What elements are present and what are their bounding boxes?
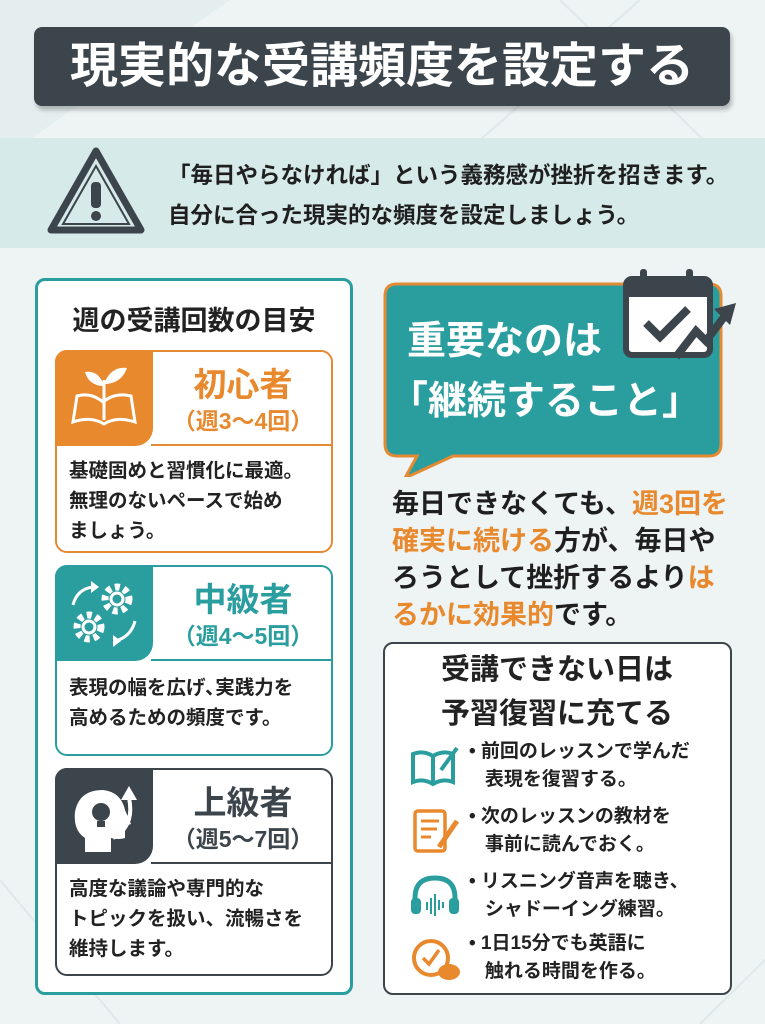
body xyxy=(69,677,293,729)
body xyxy=(69,460,303,542)
icon: calendar with arrow xyxy=(623,269,736,360)
bubble text: 「継続すること」 xyxy=(389,380,701,423)
title: 初心者 xyxy=(194,366,292,403)
panel: weekly frequency xyxy=(35,278,353,995)
card: advanced: （週5〜7回） xyxy=(173,826,313,852)
card: beginner: （週3〜4回） xyxy=(173,408,313,434)
panel: review on off days xyxy=(383,642,732,995)
warning text: 自分に合った現実的な頻度を設定しましょう。 xyxy=(168,203,639,228)
paragraph: continuation: ろうとして挫折するよりは xyxy=(392,563,715,593)
item 1: 表現を復習する。 xyxy=(485,769,637,790)
item 4: • 1日15分でも英語に xyxy=(469,933,646,954)
warning band xyxy=(0,138,765,248)
body: トピックを扱い、流暢さを xyxy=(69,908,303,930)
warning text: 「毎日やらなければ」という義務感が挫折を招きます。 xyxy=(168,163,728,188)
item 3: • リスニング音声を聴き、 xyxy=(469,871,689,892)
paragraph: continuation: 毎日できなくても、週3回を xyxy=(392,489,728,519)
body: 高度な議論や専門的な xyxy=(69,878,264,900)
icon: warning triangle xyxy=(48,148,144,234)
item 3 xyxy=(411,870,689,920)
card: intermediate: （週4〜5回） xyxy=(173,623,313,649)
heading: 週の受講回数の目安 xyxy=(72,306,316,336)
item 2: 事前に読んでおく。 xyxy=(485,834,655,855)
body: 維持します。 xyxy=(69,938,184,960)
item 3: シャドーイング練習。 xyxy=(485,899,675,920)
card: advanced xyxy=(55,768,333,976)
item 4: 触れる時間を作る。 xyxy=(485,961,656,982)
heading xyxy=(441,654,673,730)
heading: 受講できない日は xyxy=(441,654,673,686)
item 4 xyxy=(412,932,656,982)
item 1: • 前回のレッスンで学んだ xyxy=(469,741,690,762)
title bar xyxy=(34,27,730,106)
body: 高めるための頻度です。 xyxy=(69,707,282,729)
body: 無理のないペースで始め xyxy=(69,490,283,512)
title bar: 現実的な受講頻度を設定する xyxy=(70,40,694,93)
icon: book sprout xyxy=(55,350,153,446)
icon: head lightbulb xyxy=(55,768,153,864)
bubble text: 重要なのは xyxy=(407,320,602,363)
heading: 予習復習に充てる xyxy=(441,698,673,730)
bubble text xyxy=(389,320,701,423)
card: beginner xyxy=(55,350,333,553)
card: intermediate xyxy=(55,565,333,756)
item 2: • 次のレッスンの教材を xyxy=(469,806,671,827)
icon: gears xyxy=(55,565,153,661)
body xyxy=(69,878,303,960)
paragraph: continuation: るかに効果的です。 xyxy=(392,600,632,630)
body: 基礎固めと習慣化に最適。 xyxy=(69,460,303,482)
warning text xyxy=(168,163,728,228)
item 1 xyxy=(411,740,690,790)
item 2 xyxy=(413,806,671,855)
body: 表現の幅を広げ､実践力を xyxy=(69,677,293,699)
speech bubble xyxy=(384,282,722,477)
paragraph: continuation xyxy=(392,489,728,630)
paragraph: continuation: 確実に続ける方が、毎日や xyxy=(392,526,715,556)
title: 中級者 xyxy=(194,581,292,618)
body: ましょう。 xyxy=(69,520,165,542)
title: 上級者 xyxy=(194,784,292,821)
